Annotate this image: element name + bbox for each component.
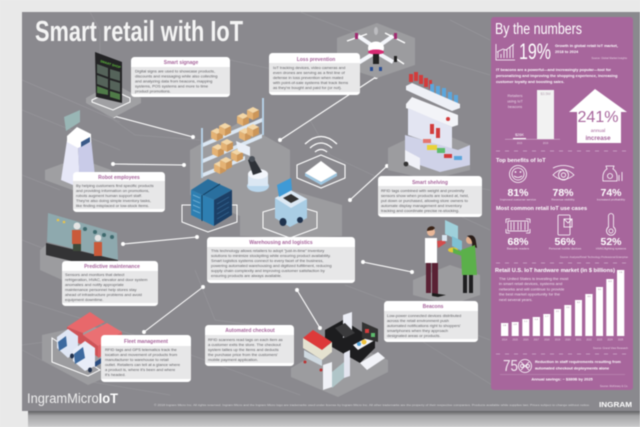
section: top benefits of IoT: 74% (600, 187, 622, 199)
illustration: warehouse shelves (202, 98, 263, 178)
arrow: 241 percent annual increase: increase (585, 135, 611, 142)
callout: robot employees: like finding misplaced or low-stock items. (76, 203, 149, 208)
callout: smart signage: Smart signage (164, 60, 198, 66)
icon: growth chart (496, 44, 515, 60)
arrow: 241 percent annual increase: 241% (578, 109, 618, 126)
callout: robot employees: and providing information on promotions, (76, 188, 149, 193)
bar chart: hardware market by year: 2018 (544, 338, 550, 342)
illustration: fleet management (42, 312, 135, 385)
callout: robot employees: robots augment human support staff. (76, 193, 142, 198)
callout: warehousing and logistics: solutions to minimize stockpiling while ensuring product availability. (211, 253, 331, 258)
callout: smart signage: product promotions. (135, 88, 171, 94)
bar chart: hardware market by year: 2020 (565, 338, 571, 342)
callout: predictive maintenance: Sensors and monitors that detect (65, 272, 125, 277)
bar chart: hardware market by year: 2015 (513, 338, 519, 342)
icon: percent fan (518, 360, 532, 372)
callout: predictive maintenance (62, 261, 158, 306)
callout: predictive maintenance: ahead of infrastructure problems and avoid (65, 292, 142, 297)
section: US IoT hardware market: Source: Grand View Research (593, 346, 629, 350)
illustration: predictive maintenance (40, 213, 122, 288)
illustration: smart shelving (388, 72, 470, 180)
illustration: digital signage: SMART SHOP (100, 59, 122, 70)
illustration: robot arm (236, 141, 269, 192)
title: Smart retail with IoT (35, 16, 243, 48)
bar chart: hardware market by year: 0.8 (503, 325, 507, 327)
callout: smart signage: Digital signs are used to showcase products, (135, 68, 215, 74)
callout: beacons: designated areas or products. (387, 333, 441, 338)
market description: the best market opportunity for the (499, 292, 561, 297)
bar chart: hardware market by year: 2023 (597, 338, 603, 342)
callout: smart shelving: put down or purchased, allowing store owners to (381, 198, 469, 203)
callout: automated checkout: Automated checkout (225, 328, 275, 334)
bar chart: hardware market by year: 2025 (618, 338, 624, 342)
section: top benefits of IoT: Increased profitability (597, 198, 626, 202)
bar chart: retailers using IoT beacons: using IoT (507, 100, 523, 104)
bar chart: hardware market by year: 1.4 (535, 319, 539, 321)
callout: fleet management: Fleet management (124, 339, 168, 345)
callout: loss prevention: even drones are serving as a first line of (273, 70, 346, 75)
illustration: wireless hub icon (297, 136, 345, 188)
callout: fleet management (101, 335, 191, 382)
callout: predictive maintenance: equipment downtime. (65, 297, 103, 302)
callout: warehousing and logistics: Warehousing and logistics (249, 240, 313, 246)
callout: warehousing and logistics (207, 237, 355, 283)
stat: 19 percent growth (519, 39, 628, 64)
section: most common retail IoT use cases: Personal mobile devices (549, 246, 582, 250)
callout: predictive maintenance: maintenance personnel help stores stay (65, 287, 138, 292)
market description: The United States is investing the most (499, 276, 569, 281)
connectors (112, 76, 413, 333)
bar chart: hardware market by year: 7.9 (619, 272, 623, 274)
callout: fleet management: it's headed. (105, 372, 126, 377)
arrow: 241 percent annual increase (569, 89, 627, 143)
section: most common retail IoT use cases: 52% (600, 236, 622, 248)
panel heading: By the numbers (495, 21, 582, 38)
panel: by the numbers (491, 17, 633, 390)
illustration: automated guided vehicle (275, 178, 307, 227)
icon: smile (510, 166, 526, 182)
bar chart: hardware market by year: 2.6 (566, 307, 570, 309)
icon: eye (553, 166, 574, 180)
bar chart: hardware market by year: 2.1 (556, 311, 560, 313)
bar chart: retailers using IoT beacons (505, 90, 560, 145)
stat: 75 percent staff reduction: 75 (503, 358, 518, 375)
bar chart: hardware market by year: 1.1 (524, 321, 528, 323)
bar chart: hardware market by year (501, 270, 624, 342)
callout: smart signage: and analyzing data from beacons, mapping (135, 78, 212, 84)
intro text: beacons: personalizing and improving the shopping experience, increasing (496, 73, 618, 78)
legal footer: © 2018 Ingram Micro Inc. All rights reserved. Ingram Micro and the Ingram Micro logo are trademarks used under license by Ingram Micro Inc. All other trademarks are the property of their respective companies. Products available while supplies last. Prices subject to change without notice. (154, 404, 591, 407)
callout: beacons: smartphones when they approach (387, 328, 448, 333)
stat: 19 percent growth: 2018 to 2024 (555, 49, 579, 54)
bar chart: hardware market by year: 0.9 (514, 324, 518, 326)
callout: smart signage: discounts and messaging while also collecting (135, 74, 218, 78)
callout: robot employees: By helping customers find specific products (76, 183, 154, 188)
stat: 19 percent growth: Source: Global Market Insights (592, 56, 628, 60)
market description: networks and will continue to provide (499, 286, 565, 291)
bar chart: hardware market by year: 2016 (523, 338, 529, 342)
callout: automated checkout: the purchase price from the customers' (208, 352, 278, 357)
callout: loss prevention: IoT tracking devices, video cameras and (273, 65, 345, 70)
bar chart: retailers using IoT beacons: 2015 (517, 142, 523, 145)
icon: money bag (603, 166, 622, 181)
arrow: 241 percent annual increase: annual (591, 128, 605, 134)
illustration: robot employee (45, 110, 111, 192)
callout: smart signage (131, 57, 230, 97)
callout: robot employees: They're also doing simple inventory tasks, (76, 198, 151, 203)
callout: smart shelving: Smart shelving (412, 180, 448, 186)
bar chart: retailers using IoT beacons: $3.5M (540, 92, 550, 96)
bar chart: hardware market by year: 1.7 (545, 316, 549, 318)
callout: smart shelving: RFID tags combined with weight and proximity (381, 188, 465, 193)
bar chart: hardware market by year: 4.0 (587, 296, 591, 298)
icon: mobile device (558, 215, 572, 235)
section: top benefits of IoT: Revenue visibility (551, 198, 575, 202)
section: most common retail IoT use cases: Barcode readers (507, 246, 530, 250)
callout: predictive maintenance: anomalies and notify appropriate (65, 282, 124, 287)
section: most common retail IoT use cases: 68% (507, 236, 529, 248)
bar chart: hardware market by year: 5.0 (598, 289, 602, 291)
callout: smart shelving (378, 176, 482, 217)
callout: warehousing and logistics: supply chain complexity and improving customer satisfaction by (211, 268, 326, 273)
callout: beacons (384, 301, 478, 342)
market description: next several years. (499, 297, 533, 302)
section: most common retail IoT use cases: Source: Analysts/Retail Technology Professional Enterprise (560, 255, 629, 259)
callout: loss prevention: Loss prevention (297, 57, 335, 63)
callout: warehousing and logistics: Smart logistics systems connect to every facet of the business, (211, 258, 323, 263)
market description (499, 276, 569, 302)
illustration: warehouse hub platform (182, 122, 342, 238)
stat: 19 percent growth: Growth in global retail IoT market, (555, 43, 618, 48)
illustration: digital signage (86, 52, 141, 118)
bar chart: hardware market by year: 2022 (586, 338, 592, 342)
illustration: automated checkout (291, 312, 388, 397)
callout: fleet management: manufacturer to warehouse to retail (105, 357, 169, 362)
panel: by the numbers: Source: McKinsey & Co. (600, 384, 628, 388)
callout: beacons: Beacons (423, 304, 444, 310)
callout: smart shelving: tracking and coordinate precise re-stocking. (381, 208, 459, 213)
callout: automated checkout: a customer exits the store. The checkout (208, 342, 282, 347)
callout: automated checkout: system tallies up the items and deducts (208, 347, 279, 352)
callout: predictive maintenance: refrigeration, HVAC, elevator and door system (65, 277, 148, 282)
annual savings: Annual savings: ~ $380B by 2025 (531, 376, 593, 382)
callout: warehousing and logistics: ensuring products are always available. (211, 273, 282, 278)
callout: fleet management: a product is, where it's been and where (105, 367, 176, 372)
callout: loss prevention: with point-of-sale systems that track items (273, 80, 348, 85)
intro text: beacons: customer loyalty and boosting sales. (496, 79, 564, 84)
icon: barcode reader (506, 219, 530, 233)
section: most common retail IoT use cases: Most common retail IoT use cases (496, 206, 587, 212)
intro text: beacons (496, 67, 618, 84)
bar chart: retailers using IoT beacons: Retailers (508, 94, 523, 98)
callout: fleet management: location and movement of products from (105, 352, 178, 357)
callout: warehousing and logistics: powering automated warehousing and digitized fulfillment, reducing (211, 263, 332, 268)
section: top benefits of IoT: Improved customer service (500, 198, 536, 202)
bar chart: hardware market by year: 3.2 (577, 302, 581, 304)
bar chart: retailers using IoT beacons: 2019 (543, 142, 549, 145)
section: most common retail IoT use cases (496, 206, 629, 259)
callout: automated checkout (205, 325, 294, 366)
section: top benefits of IoT: 78% (552, 187, 574, 199)
callout: smart signage: systems, POS systems and more to time (135, 84, 209, 88)
stat: 75 percent staff reduction: Reduction in staff requirements resulting from (535, 359, 621, 364)
section: most common retail IoT use cases: 56% (554, 236, 576, 248)
illustration: server racks (191, 179, 232, 226)
callout: beacons: across the retail environment push (387, 318, 449, 323)
callout: automated checkout: mobile payment application. (208, 357, 258, 362)
stat: 75 percent staff reduction: automated checkout deployments alone (535, 366, 610, 370)
market description: in smart retail devices, systems and (499, 281, 562, 286)
callout: fleet management: RFID tags and GPS telematics track the (105, 347, 177, 352)
stat: 75 percent staff reduction (503, 358, 621, 375)
bar chart: retailers using IoT beacons: $26K (515, 133, 524, 137)
callout: smart shelving: automate display management and inventory (381, 203, 463, 208)
section: US IoT hardware market: Retail U.S. IoT hardware market (in $ billions) (495, 268, 615, 274)
footer logo: Ingram: INGRAM (599, 402, 632, 409)
bar chart: hardware market by year: 2021 (576, 338, 582, 342)
bar chart: hardware market by year: 2014 (502, 338, 508, 342)
bar chart: hardware market by year: 2024 (607, 338, 613, 342)
icon: thermometer (606, 214, 616, 235)
illustration: drone (337, 23, 415, 78)
intro text: beacons: IT beacons are a powerful—and increasingly popular—tool for (496, 67, 611, 72)
callout: robot employees (73, 172, 165, 212)
section: top benefits of IoT: 81% (507, 187, 529, 199)
callout: predictive maintenance: Predictive maintenance (84, 264, 140, 270)
callout: fleet management: outlet. Retailers can tell at a glance where (105, 362, 181, 367)
section: top benefits of IoT (496, 158, 626, 202)
bar chart: retailers using IoT beacons: beacons (508, 105, 522, 109)
bar chart: hardware market by year: 6.3 (608, 281, 612, 283)
callout: beacons: Low-power connected devices distributed (387, 313, 461, 318)
callout: automated checkout: RFID scanners read tags on each item as (208, 337, 283, 342)
callout: loss prevention: as they're bought and paid for (or not). (273, 85, 342, 90)
callout: warehousing and logistics: This technology allows retailers to adopt "just-in-time" inventory (211, 248, 325, 253)
callout: robot employees: Robot employees (98, 175, 140, 181)
stat: 19 percent growth: 19% (519, 39, 551, 64)
callout: smart shelving: sensors show when products are looked at, held, (381, 193, 469, 198)
section: most common retail IoT use cases: HVAC/lighting systems (596, 246, 627, 250)
section: US IoT hardware market (495, 268, 629, 350)
footer logo: Ingram Micro IoT: IngramMicroIoT (27, 391, 119, 406)
illustration: shoppers with beacons (413, 220, 480, 305)
bar chart: hardware market by year: 2017 (534, 338, 540, 342)
callout: loss prevention (269, 53, 360, 95)
poster shadow (28, 411, 640, 427)
bar chart: hardware market by year: 2019 (555, 338, 561, 342)
section: top benefits of IoT: Top benefits of IoT (496, 158, 546, 164)
callout: beacons: automated notifications right to shoppers' (387, 323, 461, 328)
callout: loss prevention: defense in loss prevention when mated (273, 75, 343, 80)
